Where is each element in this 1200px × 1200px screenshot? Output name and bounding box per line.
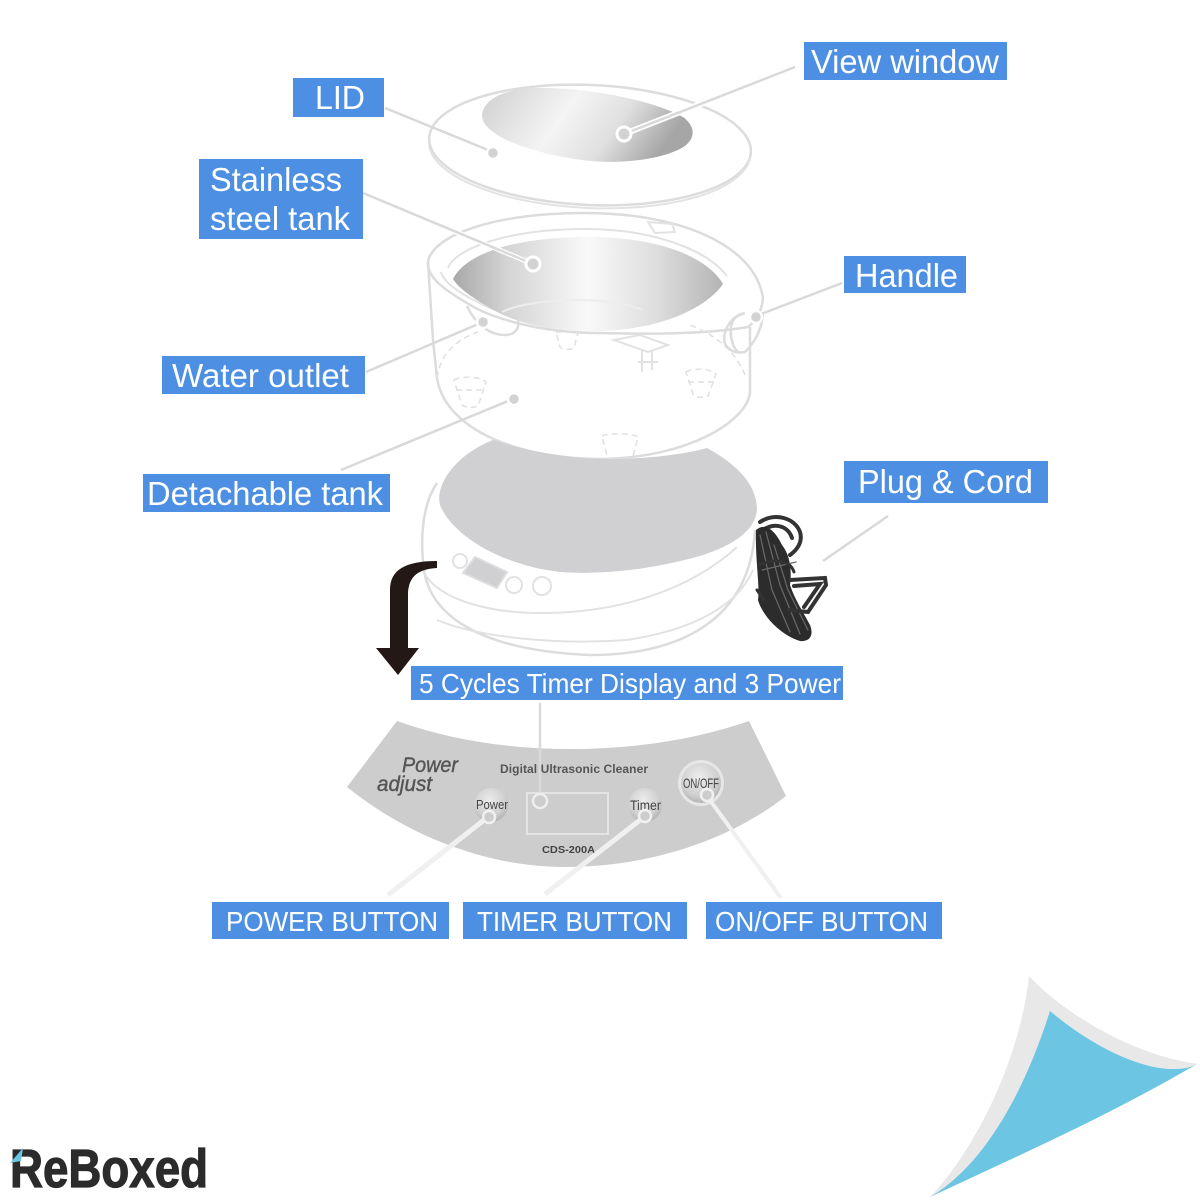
label: Water outlet: Water outlet — [172, 357, 349, 394]
base outline — [422, 483, 755, 655]
lid outline — [426, 78, 754, 215]
label: on off button: ON/OFF BUTTON — [715, 906, 928, 937]
logo corner — [10, 1148, 23, 1163]
on off button leader — [701, 789, 781, 898]
base button right — [533, 577, 551, 595]
handle leader — [750, 283, 842, 323]
heating plate — [439, 440, 757, 573]
feet — [454, 377, 486, 407]
label: LID: LID — [315, 79, 365, 116]
display leader — [533, 703, 547, 808]
label: power button: POWER BUTTON — [226, 906, 438, 937]
base band — [424, 547, 753, 642]
stainless tank leader — [363, 193, 540, 271]
timer button — [628, 788, 662, 822]
power adjust logo — [377, 754, 459, 796]
leader lines — [341, 67, 888, 898]
power adjust logo: adjust — [377, 773, 433, 796]
label: timer display: 5 Cycles Timer Display and 3 Power — [419, 668, 841, 699]
view window leader — [617, 67, 795, 141]
logo wordmark: ReBoxed — [10, 1139, 208, 1199]
view window glass — [482, 88, 693, 162]
panel background — [347, 721, 786, 867]
power button — [474, 788, 509, 822]
label: Detachable tank: Detachable tank — [147, 475, 383, 512]
display icon — [463, 557, 507, 588]
transducer bracket — [614, 335, 668, 372]
stainless steel tank body — [428, 213, 763, 460]
tank rim — [428, 213, 763, 334]
detachable tank leader — [341, 393, 520, 470]
label: Stainless steel tank: Stainless — [210, 161, 342, 198]
timer button leader — [545, 810, 651, 894]
base — [422, 440, 757, 655]
handle knob — [724, 312, 763, 352]
water outlet leader — [366, 316, 489, 372]
on off button — [678, 760, 724, 806]
label: Stainless steel tank — [199, 159, 363, 239]
control panel — [347, 721, 786, 867]
timer button: Timer — [630, 797, 661, 813]
logo: ReBoxed — [10, 1139, 208, 1199]
label: timer button: TIMER BUTTON — [477, 906, 672, 937]
label: Plug and Cord: Plug & Cord — [858, 463, 1033, 500]
power button: Power — [476, 797, 509, 812]
arrow down — [376, 561, 437, 675]
page curl — [930, 976, 1198, 1197]
label: Handle: Handle — [855, 257, 958, 294]
water outlet — [467, 306, 518, 335]
product name: Digital Ultrasonic Cleaner — [500, 762, 648, 776]
label: LID — [293, 78, 384, 117]
latch — [648, 222, 675, 233]
lid leader — [385, 108, 499, 159]
tank interior — [453, 237, 723, 331]
label: View window: View window — [811, 43, 999, 80]
on off button: ON/OFF — [683, 775, 719, 791]
dashed seam — [437, 325, 745, 378]
tank floor curve — [502, 300, 642, 312]
curl blue — [930, 1011, 1197, 1197]
lid — [426, 78, 754, 215]
body sides — [428, 262, 750, 459]
curl shadow — [930, 976, 1198, 1197]
plug and cord — [756, 517, 826, 641]
model number: CDS-200A — [542, 845, 595, 856]
base button middle — [506, 577, 522, 593]
cord leader — [823, 516, 888, 561]
power button leader — [388, 811, 495, 895]
display window — [527, 793, 608, 834]
power adjust logo: Power — [402, 754, 459, 777]
control icons — [453, 554, 467, 568]
label: Stainless steel tank: steel tank — [210, 200, 350, 237]
inner rim — [441, 229, 727, 312]
